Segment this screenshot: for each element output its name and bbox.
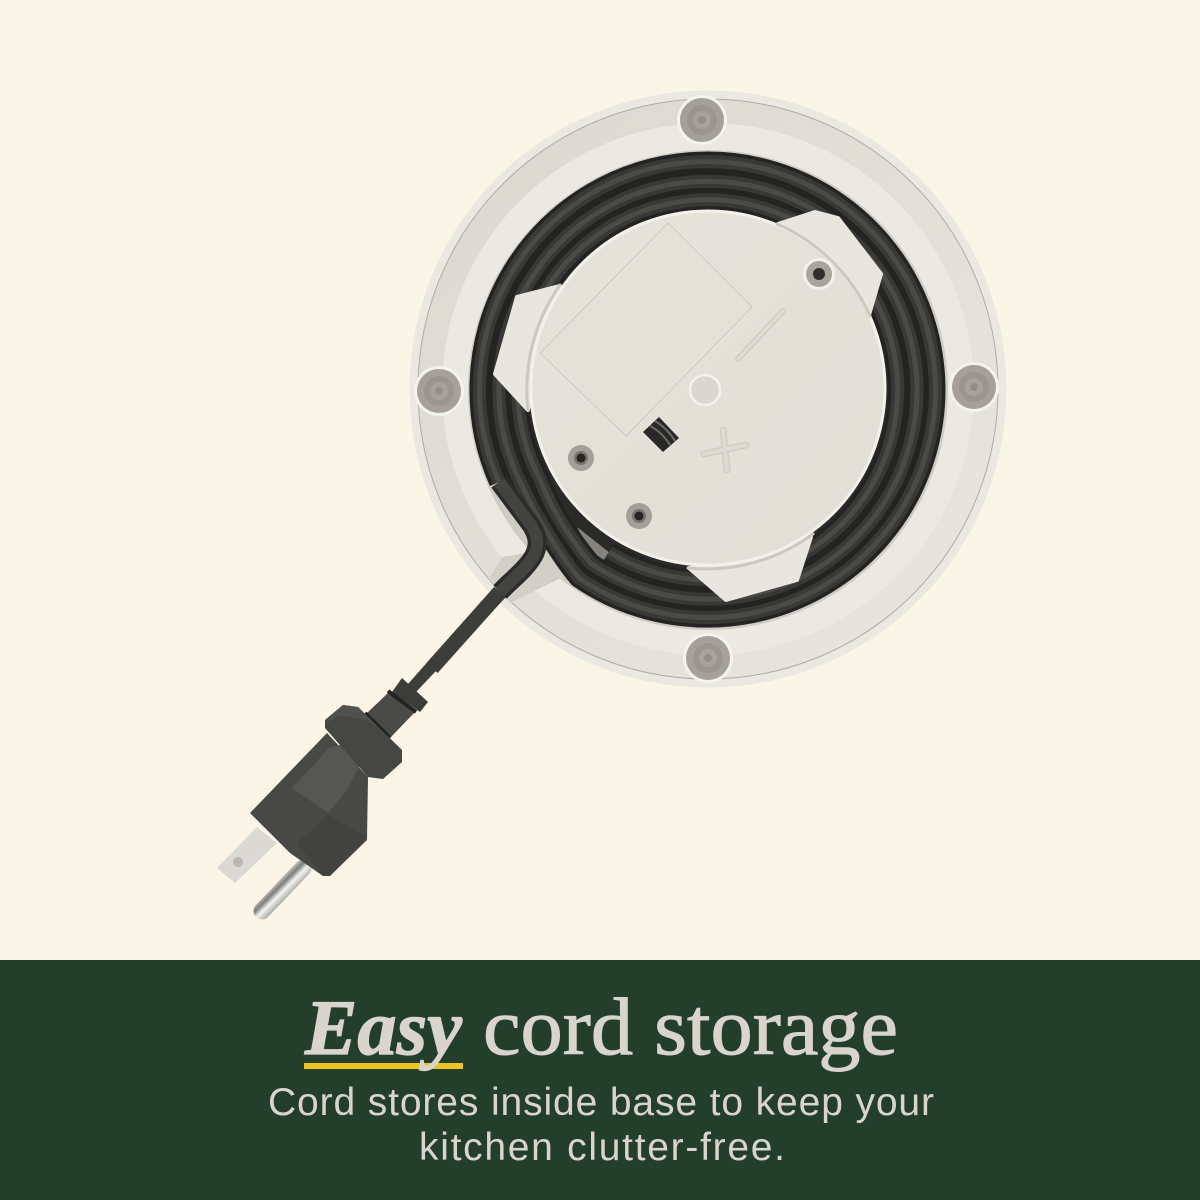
recess behind coil [508, 190, 908, 590]
outer rim [410, 90, 1006, 688]
cord slot [643, 417, 679, 452]
round ground pin [262, 868, 303, 911]
rubber feet [414, 95, 999, 683]
flat blade [217, 827, 277, 883]
coiled cord [479, 162, 935, 618]
centre plate [531, 211, 885, 565]
power cord and plug [217, 482, 537, 911]
cord exit [408, 482, 537, 692]
cord channel notch [490, 550, 563, 603]
tab grooves [527, 224, 870, 569]
body text [268, 1081, 934, 1169]
screws [568, 258, 835, 529]
mounting tabs [495, 212, 881, 600]
kettle base [410, 90, 1006, 688]
heading: Easy [304, 984, 462, 1071]
caption band [0, 960, 1200, 1200]
body text: kitchen clutter-free. [419, 1126, 785, 1169]
plug body [250, 678, 428, 876]
heading: cord storage [483, 981, 898, 1072]
heading [304, 981, 898, 1072]
body text: Cord stores inside base to keep your [268, 1081, 934, 1124]
